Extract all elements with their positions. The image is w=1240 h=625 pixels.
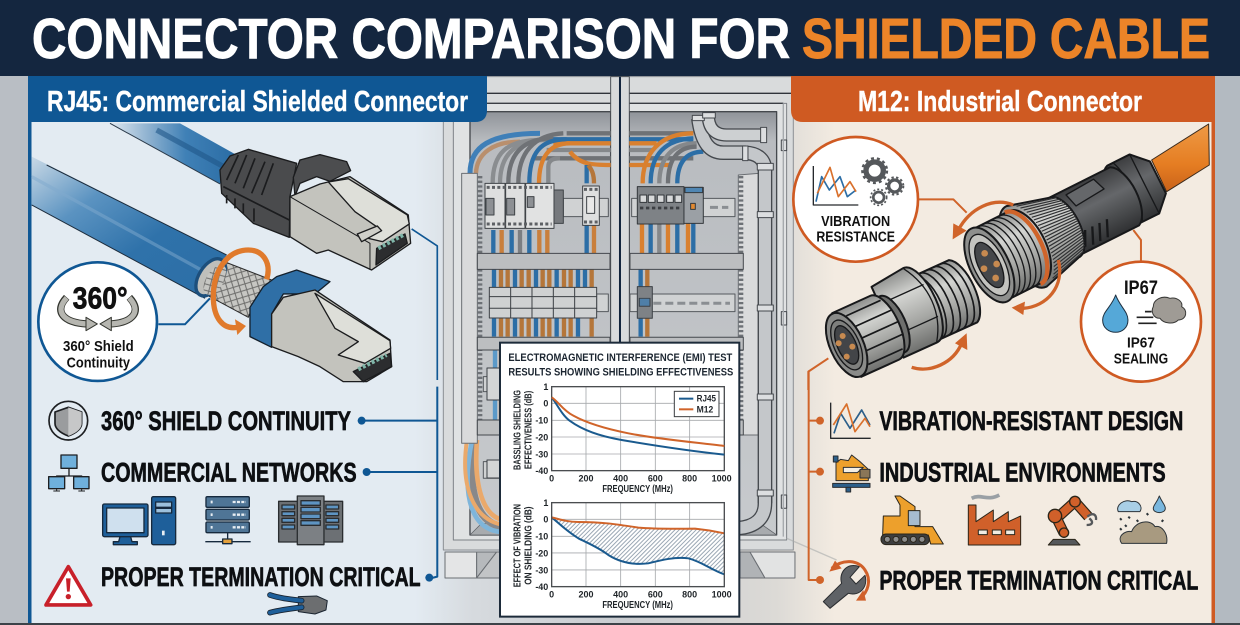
centre door bar [611, 77, 629, 550]
din rails [483, 198, 735, 478]
icon: warning triangle [46, 567, 91, 605]
x axis ticks: 800 [682, 473, 697, 483]
connector 2 metal [272, 290, 392, 382]
y axis label: EFFECTIVENESS (dB) [524, 391, 535, 469]
y axis ticks: -10 [535, 532, 548, 542]
female pins [981, 250, 1000, 281]
y axis label [513, 390, 535, 470]
y axis ticks: -10 [535, 416, 548, 426]
text: 360 shield continuity: 360° SHIELD CONTINUITY [101, 406, 351, 436]
legend: RJ45 [697, 394, 716, 404]
y axis label: EFFECT OF VIBRATION [513, 504, 524, 587]
uprights [462, 173, 758, 443]
x axis ticks: 0 [549, 473, 554, 483]
icon: crimping tool [270, 595, 327, 614]
x axis ticks: 1000 [712, 589, 732, 599]
label text: VIBRATION [821, 214, 890, 230]
x axis ticks: 0 [549, 589, 554, 599]
chart title [508, 352, 734, 379]
icon: factory [968, 495, 1021, 545]
cable 1 [110, 123, 237, 184]
x axis ticks: 200 [578, 589, 593, 599]
y axis ticks [535, 498, 548, 592]
y axis ticks: -30 [535, 449, 548, 459]
heading: M12: M12: Industrial Connector [858, 86, 1142, 118]
text: proper termination critical: PROPER TERMINATION CRITICAL [101, 562, 421, 592]
icon: wrench and arrows [823, 561, 869, 608]
chart title: RESULTS SHOWING SHIELDING EFFECTIVENESS [508, 367, 734, 379]
connector 2 boot [250, 270, 330, 347]
y axis ticks: 1 [543, 498, 548, 508]
callout: vibration resistance: RESISTANCE [816, 230, 895, 246]
panel: RJ45 connectors [32, 123, 437, 382]
y axis ticks: -30 [535, 565, 548, 575]
panel: M12 right edge [1212, 76, 1215, 625]
cable 2 [32, 157, 227, 298]
y axis ticks: 1 [543, 382, 548, 392]
y axis ticks: -40 [535, 582, 548, 592]
connector 1 metal [290, 177, 411, 270]
thread [905, 255, 988, 342]
icon: weather and dust [1118, 496, 1167, 543]
y axis label: BASSLING SHIELDING [513, 390, 524, 470]
panel: RJ45 features [46, 387, 437, 614]
callout: vibration resistance [793, 137, 918, 262]
360 text: 360° [73, 281, 128, 315]
y axis ticks: -20 [535, 432, 548, 442]
y axis label: ON SHIELDING (dB) [524, 506, 535, 585]
braided shield [203, 260, 272, 317]
face [954, 220, 1025, 310]
strain relief nut [1095, 148, 1173, 231]
heading: M12 [791, 76, 1212, 122]
leader line [412, 229, 437, 380]
icon: dust cloud [1137, 297, 1186, 323]
right bay [629, 112, 777, 535]
leader lines [362, 387, 437, 578]
chart: effect of vibration on shielding [513, 498, 732, 611]
icon: excavator [881, 496, 943, 545]
y axis ticks: 0 [543, 515, 548, 525]
x axis ticks: 400 [613, 473, 628, 483]
face [817, 307, 876, 383]
leader lines [809, 372, 820, 580]
m12 curve [552, 397, 724, 446]
legend: M12 [697, 405, 713, 415]
icon: server stack [205, 497, 251, 544]
icon: shield [49, 401, 88, 440]
x axis ticks: 1000 [712, 473, 732, 483]
callout: 360 shield continuity [38, 262, 157, 381]
m12 curve [552, 517, 724, 533]
text: commercial networks: COMMERCIAL NETWORKS [101, 458, 357, 488]
dots [358, 417, 433, 582]
threaded nose [972, 203, 1061, 300]
upper right breakers [637, 187, 703, 224]
left bay [470, 112, 611, 535]
panel: M12 features [809, 372, 1198, 608]
legend [674, 391, 719, 417]
heading: RJ45 [28, 76, 487, 122]
connector lines [808, 199, 1141, 390]
knurled ring [988, 180, 1098, 296]
x axis label: FREQUENCY (MHz) [602, 600, 673, 611]
y axis ticks [535, 382, 548, 476]
fluted collar [832, 290, 913, 377]
icon: server rack [279, 496, 343, 545]
wires [465, 133, 703, 532]
callout: 360 shield continuity: Continuity [67, 355, 130, 371]
connector 1 boot [220, 149, 351, 237]
orange cable [1152, 124, 1209, 192]
door edge and feet [781, 103, 785, 537]
arrows [61, 297, 135, 331]
dots [816, 417, 824, 584]
callout: IP67 sealing [1081, 262, 1201, 382]
bottom rule [0, 623, 1240, 625]
x axis ticks: 200 [578, 473, 593, 483]
shelves [477, 253, 743, 435]
icon: vibration chart [831, 403, 871, 438]
x axis ticks: 600 [648, 473, 663, 483]
x axis label: FREQUENCY (MHz) [602, 484, 673, 495]
chart: baseline shielding effectiveness [513, 382, 732, 495]
panel: RJ45 left edge [28, 76, 32, 625]
orange rotation arrows [912, 202, 1060, 369]
terminal blocks [487, 287, 652, 478]
panel: M12 connectors [793, 124, 1209, 390]
y axis ticks: -20 [535, 548, 548, 558]
male pins [836, 333, 855, 360]
title text white: CONNECTOR COMPARISON FOR [32, 7, 790, 71]
y axis ticks: -40 [535, 466, 548, 476]
icon: network [49, 455, 89, 491]
hatched area [552, 517, 724, 574]
icon: robot arm [1048, 496, 1096, 545]
chart panel: EMI test results [500, 343, 739, 617]
gears [862, 158, 903, 205]
x axis ticks: 800 [682, 589, 697, 599]
callout: IP67 sealing: SEALING [1114, 352, 1168, 368]
y axis label [513, 504, 535, 587]
orange rotation arrow [213, 250, 268, 335]
cabinet feet [445, 552, 795, 578]
electrical cabinet illustration [437, 77, 837, 578]
collar neck [867, 291, 917, 358]
x axis ticks [549, 589, 732, 599]
upper left breakers [485, 183, 599, 228]
icon: industrial machine [833, 455, 870, 492]
chart title: ELECTROMAGNETIC INTERFERENCE (EMI) TEST [508, 352, 732, 364]
connector line to circle [158, 298, 210, 324]
label text: 360° Shield [63, 339, 134, 355]
callout: IP67 sealing: IP67 [1124, 278, 1158, 299]
mini chart [813, 166, 858, 205]
icon: desktop computer [103, 497, 176, 545]
x axis ticks: 400 [613, 589, 628, 599]
rj45 curve [552, 517, 724, 574]
x axis ticks: 600 [648, 589, 663, 599]
y axis ticks: 0 [543, 399, 548, 409]
x axis ticks [549, 473, 732, 483]
icon: water drop [1103, 295, 1128, 332]
rj45 curve [552, 397, 724, 455]
title band [0, 0, 1240, 76]
conduit [698, 115, 765, 528]
callout: IP67 sealing: IP67 [1127, 336, 1155, 352]
male connector [812, 245, 989, 384]
body [1046, 162, 1150, 257]
bay floors [470, 523, 777, 535]
female connector [952, 140, 1179, 314]
heading: RJ45: RJ45: Commercial Shielded Connector [47, 86, 468, 118]
hex nut [870, 261, 952, 358]
